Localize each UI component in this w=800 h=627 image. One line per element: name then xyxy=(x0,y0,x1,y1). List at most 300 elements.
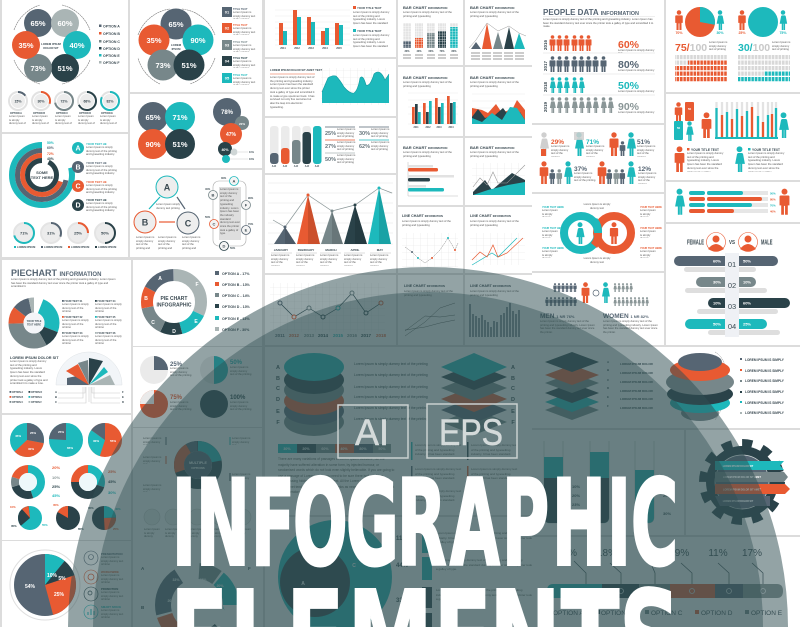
small pie labels: 35% xyxy=(11,524,17,528)
rings xyxy=(564,216,631,250)
cylinders: A-D xyxy=(294,165,298,168)
heading and body: LOREM IPSUM DOLOR SIT AMET TEXT xyxy=(270,68,323,72)
tab text: Lorem Ipsum is simply dummy text of the printing and typesetting industry. It has been the standard dummy text ever since the printer took a galley of type. xyxy=(436,558,532,571)
legend text: YOUR TITLE TEXT xyxy=(357,6,382,10)
heading: BAR CHART INFORMATION xyxy=(470,145,514,150)
circle 73%: 73% xyxy=(30,64,46,73)
people rows left xyxy=(545,283,577,306)
panel: female vs male xyxy=(666,224,800,345)
donut one legend xyxy=(52,465,60,498)
pie 50%: 50% xyxy=(230,360,243,366)
disc legend: LOREM IPSUM IS SIMPLY xyxy=(745,401,785,405)
sectors xyxy=(163,571,231,627)
lines xyxy=(405,303,455,336)
cylinders: A-D xyxy=(283,165,287,168)
tube values: 30% xyxy=(663,511,671,516)
legend: OPTION E - 13% xyxy=(222,317,250,321)
comparison rows: 01 xyxy=(728,260,736,269)
donut row: 15% xyxy=(14,100,22,104)
legend: OPTION C xyxy=(651,610,683,617)
comparison rows: 03 xyxy=(728,302,736,311)
people rows right xyxy=(614,283,649,306)
panel: four-circle venn and bubbles xyxy=(130,94,262,168)
tile columns xyxy=(403,23,458,58)
panel: men and women xyxy=(532,273,664,345)
donut row: 68% xyxy=(83,100,91,104)
women text: Lorem Ipsum is simply dummy text of the printing and typesetting industry. Lorem Ipsum has been the standard dummy text ever since the printer. xyxy=(603,320,658,334)
heading: LINE CHART INFORMATION xyxy=(402,214,443,218)
panel: five-circle venn with numbered list xyxy=(130,0,262,92)
donut: A xyxy=(158,276,162,282)
lorem: Lorem Ipsum is simply dummy text of the printing and typesetting xyxy=(470,151,519,158)
radial ring chart: 50% xyxy=(47,141,54,145)
numbered list: 02 xyxy=(225,26,230,30)
item A: A xyxy=(75,146,81,152)
year labels: 2012 xyxy=(289,333,300,338)
AI badge: AI xyxy=(355,412,389,453)
radial ring chart: TEXT HERE xyxy=(31,175,54,180)
side labels xyxy=(143,437,254,492)
panel: line chart one xyxy=(398,207,463,273)
bands: LOREM IPSUM DOLOR SIT AMET xyxy=(723,488,761,492)
panel: multiple options ring xyxy=(133,428,262,553)
option loop: Lorem Ipsum is simply dummy text of the printing and typesetting industry. Lorem Ipsum has been the industry standard dummy text ever since the printer took a galley of type. xyxy=(220,188,240,235)
donut row: OPTION E xyxy=(101,112,113,115)
donut row xyxy=(9,92,119,125)
item C: C xyxy=(75,184,81,190)
tube values xyxy=(572,484,671,516)
option loop: 40% xyxy=(205,187,211,191)
value bar: 50% xyxy=(378,447,386,451)
value bar: 20% xyxy=(302,447,310,451)
panel: people data xyxy=(532,0,664,123)
bubble chart: 40% xyxy=(221,148,229,152)
women text: WOMEN 1 NR 82% xyxy=(603,313,649,320)
stat 71% xyxy=(574,132,606,157)
list text: TITLE TEXT xyxy=(233,40,248,44)
option loop: F xyxy=(245,202,248,208)
side blocks: Lorem Ipsum is simply dummy text of the printing and typesetting industry. It has been standard. xyxy=(471,467,517,480)
donut row: LOREM IPSUM xyxy=(98,245,116,249)
cylinders xyxy=(270,126,322,168)
pie 75%: 75% xyxy=(170,395,183,401)
pie 25% xyxy=(140,356,192,384)
disc legend: LOREM IPSUM IS SIMPLY xyxy=(745,369,785,373)
item A xyxy=(72,142,120,156)
bars: 70% xyxy=(770,204,776,208)
diamond letters: A xyxy=(511,365,515,371)
panel: big pie with icons xyxy=(2,541,131,627)
gauge captions: Lorem Ipsum is simply dummy xyxy=(212,528,228,538)
center caption: LOREM IPSUM xyxy=(41,42,61,46)
bars: 80% xyxy=(770,198,776,202)
overlay: outer semicircle xyxy=(68,267,788,627)
gauges xyxy=(144,509,251,525)
legend: OPTION F xyxy=(103,61,120,65)
comparison rows xyxy=(674,253,790,337)
value bar: 60% xyxy=(321,447,329,451)
vs: VS xyxy=(729,240,735,246)
legend: OPTION F - 30% xyxy=(222,328,250,332)
men text: MEN 1 NR 76% xyxy=(540,313,575,320)
circle 73%: 73% xyxy=(155,61,171,70)
ring: MULTIPLE xyxy=(189,461,207,465)
radial ring chart: SOME xyxy=(36,170,48,175)
legend: OPTION C xyxy=(103,40,120,44)
list text: TITLE TEXT xyxy=(233,7,248,11)
tile columns: 40% xyxy=(416,50,422,53)
tab text: Lorem Ipsum is simply dummy text of the printing and typesetting industry. It has been the standard dummy text ever since the printer took a galley of type. xyxy=(436,588,532,601)
gauge captions: Lorem Ipsum is simply dummy xyxy=(144,528,160,538)
ring xyxy=(179,446,217,484)
small pie labels: 35% xyxy=(88,506,94,510)
donut two xyxy=(75,469,101,495)
donut row: 82% xyxy=(106,100,114,104)
75 of 100 xyxy=(675,41,729,54)
percent labels xyxy=(396,536,409,604)
percent labels: 9% xyxy=(675,548,689,559)
stat text: Lorem Ipsum is simply dummy text of printing xyxy=(337,154,355,164)
option loop: B xyxy=(212,192,215,198)
left caption: YOUR TITLE TEXT xyxy=(691,148,719,152)
bars xyxy=(408,93,458,129)
bubble chart: 10% xyxy=(249,158,255,161)
bubble chart: 11% xyxy=(249,151,255,154)
node A: A xyxy=(164,182,171,192)
subheading and text: LOREM IPSUM DOLOR SIT xyxy=(10,356,59,360)
pie 70/30: 70% xyxy=(675,31,683,35)
pie one: 30% xyxy=(28,447,34,451)
row 2016 xyxy=(543,35,658,52)
cylinders: A-D xyxy=(272,165,276,168)
lorem: Lorem Ipsum is simply dummy text of the printing and typesetting xyxy=(404,290,453,297)
comparison rows: 10% xyxy=(743,280,751,284)
EPS badge xyxy=(427,404,517,458)
bars: 2013 xyxy=(308,47,314,50)
small pie two xyxy=(62,512,74,524)
circle 51%: 51% xyxy=(172,140,188,149)
side blocks: Lorem Ipsum is simply dummy text of the printing and typesetting industry. It has been standard. xyxy=(471,443,517,456)
month labels: JANUARY xyxy=(274,248,288,252)
pie 75%: Lorem Ipsum is simply dummy text of the printing xyxy=(170,401,191,411)
bars: 2011 xyxy=(280,47,286,50)
year labels: 2018 xyxy=(376,333,387,338)
pie 25/75: 75% xyxy=(779,31,787,35)
year labels: 2016 xyxy=(347,333,358,338)
pie one xyxy=(15,431,36,451)
captions xyxy=(136,236,201,251)
panel: clustered bars xyxy=(398,67,463,136)
diamond labels: E xyxy=(607,395,609,399)
comparison rows: 25% xyxy=(743,322,751,326)
item C xyxy=(72,180,120,194)
pie: 54% xyxy=(25,584,36,590)
tube values: 20% xyxy=(663,493,671,498)
woman icon xyxy=(602,282,610,303)
donut xyxy=(16,305,52,341)
man xyxy=(780,189,789,215)
donut two legend: 45% xyxy=(108,479,116,484)
panel: triangle bar chart xyxy=(465,0,532,65)
donut one legend: 45% xyxy=(52,493,60,498)
icon rows: WORLDWIDE xyxy=(101,570,119,574)
disc stack xyxy=(666,352,734,421)
left caption xyxy=(675,146,725,172)
pie three xyxy=(93,432,116,448)
numbered list: 05 xyxy=(225,76,230,80)
option loop: 70% xyxy=(248,222,254,226)
row 2019: 90% xyxy=(618,101,640,113)
pie 25/75: 25% xyxy=(738,31,746,35)
heading: BAR CHART INFORMATION xyxy=(470,75,514,80)
disc captions: Lorem Ipsum is simply dummy text of the printing xyxy=(354,385,428,389)
pie 100% xyxy=(200,390,252,418)
comparison rows: 50% xyxy=(713,322,721,326)
sectors: 33% xyxy=(172,578,180,582)
stat text: 30% xyxy=(359,131,370,137)
pie 50% xyxy=(200,356,252,384)
donut: D xyxy=(172,329,176,335)
disc legend: LOREM IPSUM IS SIMPLY xyxy=(745,379,785,383)
75 of 100: 75/100 xyxy=(675,42,707,54)
month labels: FEBRUARY xyxy=(298,248,314,252)
item A: YOUR TEXT HE xyxy=(86,142,107,146)
percent labels xyxy=(557,548,762,559)
comparison rows: 30% xyxy=(713,280,721,284)
donut row: OPTION B xyxy=(33,112,45,115)
donut: INFOGRAPHIC xyxy=(156,302,192,308)
panel: six-circle venn with donuts xyxy=(2,0,128,132)
circle 90%: 90% xyxy=(190,36,206,45)
pie one: 25% xyxy=(30,431,36,435)
side blocks: Lorem Ipsum is simply dummy text of the printing and typesetting industry. It has been standard. xyxy=(415,467,461,480)
legend: OPTION A xyxy=(103,24,120,28)
semicircle chart: E xyxy=(122,395,124,399)
row 2017: 2017 xyxy=(543,60,548,71)
diamond labels: LOREM IPSUM DOLOR xyxy=(620,380,654,384)
donut row: LOREM IPSUM xyxy=(71,245,89,249)
heading: PEOPLE DATA INFORMATION xyxy=(543,8,639,17)
gauge captions: Lorem Ipsum is simply dummy xyxy=(189,528,205,538)
option loop: E xyxy=(245,228,248,232)
areas xyxy=(472,94,525,124)
value bar: 40% xyxy=(340,447,348,451)
pie 25%: Lorem Ipsum is simply dummy text of the printing xyxy=(170,367,191,377)
tile columns: 60% xyxy=(428,50,434,53)
diamond letters: D xyxy=(511,397,515,403)
circle 35%: 35% xyxy=(146,36,162,45)
disc captions: Lorem Ipsum is simply dummy text of the printing xyxy=(354,417,428,421)
panel: ABC cycle and option loop xyxy=(130,170,262,257)
small pie one xyxy=(24,512,36,524)
paragraph: There are many variations of passages of Lorem Ipsum available, but the majority have suffered alteration in some form, by injected humour, or randomised words which do not look even slightly believable. If you are going to use a passage of Lorem Ipsum, you need to be sure there isn't anything embarrassing hidden in the middle of text. All the Lorem Ipsum generators on the Internet tend to repeat predefined chunks as necessary, making this the first true generator on the Internet. xyxy=(278,457,394,494)
disc letters xyxy=(276,365,280,426)
bubble chart: 22% xyxy=(239,122,245,126)
lorem: Lorem Ipsum is simply dummy text of the printing and typesetting xyxy=(403,81,452,88)
donut row: LOREM IPSUM xyxy=(44,245,62,249)
year labels xyxy=(275,333,387,338)
numbered list: 04 xyxy=(225,58,230,64)
diamond labels: LOREM IPSUM DOLOR xyxy=(620,389,654,393)
percent labels: 33% xyxy=(396,598,409,604)
list text: TITLE TEXT xyxy=(233,73,248,77)
lorem: Lorem Ipsum is simply dummy text of the printing and typesetting xyxy=(470,11,519,18)
disc captions: Lorem Ipsum is simply dummy text of the printing xyxy=(354,362,428,366)
panel: gender bar comparison xyxy=(666,94,800,180)
bars: 2013 xyxy=(436,127,442,129)
female avatar xyxy=(706,232,726,252)
gauge captions: Lorem Ipsum is simply dummy xyxy=(235,528,251,538)
radial ring chart: 60% xyxy=(47,146,54,150)
legend: OPTION A - 17% xyxy=(222,272,250,276)
diamond labels: D xyxy=(607,386,610,390)
women text xyxy=(603,313,658,336)
semicircle chart: A xyxy=(55,390,57,394)
heading and body xyxy=(270,68,323,109)
year labels: 2014 xyxy=(318,333,329,338)
item D xyxy=(72,198,120,212)
teal labels: YOUR TEXT HERE xyxy=(542,247,564,250)
pie two: 65% xyxy=(67,446,73,450)
semicircle chart xyxy=(55,352,124,404)
venn: C xyxy=(352,563,356,569)
pie 100%: Lorem Ipsum is simply dummy text of the printing xyxy=(230,401,251,411)
circle 51%: 51% xyxy=(57,64,73,73)
legend xyxy=(62,299,123,344)
top and bottom captions xyxy=(582,203,612,265)
sectors: 20% xyxy=(167,599,175,603)
legend: OPTION B xyxy=(103,32,120,36)
comparison rows: 50% xyxy=(743,258,751,264)
subheading and text: OPTION D xyxy=(31,392,42,394)
tube values: 30% xyxy=(572,511,580,516)
disc letters: C xyxy=(276,386,280,392)
75 of 100: Lorem Ipsum is simply dummy text of printing xyxy=(709,41,727,51)
diamond letters: E xyxy=(511,409,515,415)
semicircle chart: B xyxy=(55,395,57,399)
item B: YOUR TEXT HE xyxy=(86,161,107,165)
node C: C xyxy=(185,218,192,228)
men text: Lorem Ipsum is simply dummy text of the printing and typesetting industry. Lorem Ipsum has been the standard dummy text ever since the printer. xyxy=(540,320,595,334)
value bar xyxy=(278,444,391,453)
legend text xyxy=(353,6,393,49)
large figures xyxy=(702,112,789,138)
panel: venn and title list xyxy=(265,517,532,627)
diamond letters: F xyxy=(511,420,515,426)
legend: YOUR TEXT 01 xyxy=(64,299,83,303)
circle 90%: 90% xyxy=(145,140,161,149)
connectors xyxy=(574,561,763,588)
teal labels xyxy=(542,206,564,258)
donut xyxy=(144,275,201,335)
bars: 50% xyxy=(770,192,776,196)
month labels: APRIL xyxy=(350,248,360,252)
bars: 2012 xyxy=(425,127,431,129)
panel: layered area with line xyxy=(465,138,532,205)
AI badge xyxy=(338,405,408,458)
tube values: 10% xyxy=(572,484,580,489)
female label: FEMALE xyxy=(687,238,704,246)
donut one xyxy=(15,469,41,495)
panel: quarter pies xyxy=(133,347,262,427)
side blocks xyxy=(411,442,519,507)
lorem: Lorem Ipsum is simply dummy text of the printing and typesetting xyxy=(403,151,452,158)
pie 100%: 100% xyxy=(230,395,246,401)
option loop: C xyxy=(213,222,216,226)
month labels: MARCH xyxy=(325,248,337,252)
disc letters: B xyxy=(276,376,280,382)
orange labels: YOUR TEXT HERE xyxy=(640,227,662,230)
percent labels: 17% xyxy=(742,548,762,559)
legend: OPTION D xyxy=(701,610,733,617)
panel: radial rings with ABCD list xyxy=(2,134,128,257)
list text xyxy=(233,7,257,85)
pie 25%: 25% xyxy=(170,362,183,368)
panel: test tubes xyxy=(532,430,684,535)
donut row: 72% xyxy=(60,100,68,104)
circle 65%: 65% xyxy=(145,113,161,122)
row 2017 xyxy=(543,56,658,73)
tube values: 10% xyxy=(663,484,671,489)
diamond labels: C xyxy=(607,378,610,382)
bars xyxy=(408,162,458,196)
center caption: LOREM xyxy=(171,43,181,47)
lorem: Lorem Ipsum is simply dummy text of the printing and typesetting xyxy=(470,220,519,227)
small pie labels: 55% xyxy=(42,523,48,527)
donut row: 31% xyxy=(47,230,55,236)
grid xyxy=(270,283,385,332)
bars xyxy=(689,191,776,214)
option loop: 90% xyxy=(248,196,254,200)
orange labels: YOUR TEXT HERE xyxy=(640,247,662,250)
panel: cylinder gauges xyxy=(265,118,396,173)
pie: 10% xyxy=(47,573,58,579)
tile columns: 80% xyxy=(451,50,457,53)
subheading and text: OPTION C xyxy=(12,402,23,404)
legend: OPTION E xyxy=(103,54,120,58)
year labels: 2015 xyxy=(333,333,344,338)
donut row: LOREM IPSUM xyxy=(17,245,35,249)
bubble chart: 47% xyxy=(226,132,237,138)
circle 35%: 35% xyxy=(18,41,34,50)
bars xyxy=(470,303,519,337)
heading: LINE CHART INFORMATION xyxy=(470,284,511,288)
percent labels: 22% xyxy=(557,548,577,559)
row 2018: 50% xyxy=(618,80,640,92)
stat 37%: Lorem Ipsum is simply dummy text of the printing xyxy=(574,172,595,182)
stat text: Lorem Ipsum is simply dummy text of printing xyxy=(371,141,389,151)
stat text: Lorem Ipsum is simply dummy text of printing xyxy=(337,141,355,151)
legend text: Lorem Ipsum is simply dummy text of the printing and typesetting industry. Lorem Ipsum has been the standard xyxy=(353,34,389,48)
teal labels: YOUR TEXT HERE xyxy=(542,227,564,230)
pie 25/75 xyxy=(738,10,787,35)
panel: gender pies xyxy=(666,0,800,92)
bands: LOREM IPSUM DOLOR SIT xyxy=(723,465,754,468)
panel: line chart by year xyxy=(265,275,396,345)
disc letters: F xyxy=(276,420,280,426)
list text: TITLE TEXT xyxy=(233,23,248,27)
disc legend: LOREM IPSUM IS SIMPLY xyxy=(745,390,785,394)
30 of 100 xyxy=(738,41,792,54)
comparison rows: 10% xyxy=(713,300,721,306)
legend: OPTION A xyxy=(553,610,584,617)
segmented bar xyxy=(547,584,783,598)
panel: family percentages xyxy=(532,125,664,192)
heading: BAR CHART INFORMATION xyxy=(403,145,447,150)
disc legend: LOREM IPSUM IS SIMPLY xyxy=(745,358,785,362)
legend: OPTION E xyxy=(751,610,783,617)
item D: D xyxy=(75,202,81,210)
